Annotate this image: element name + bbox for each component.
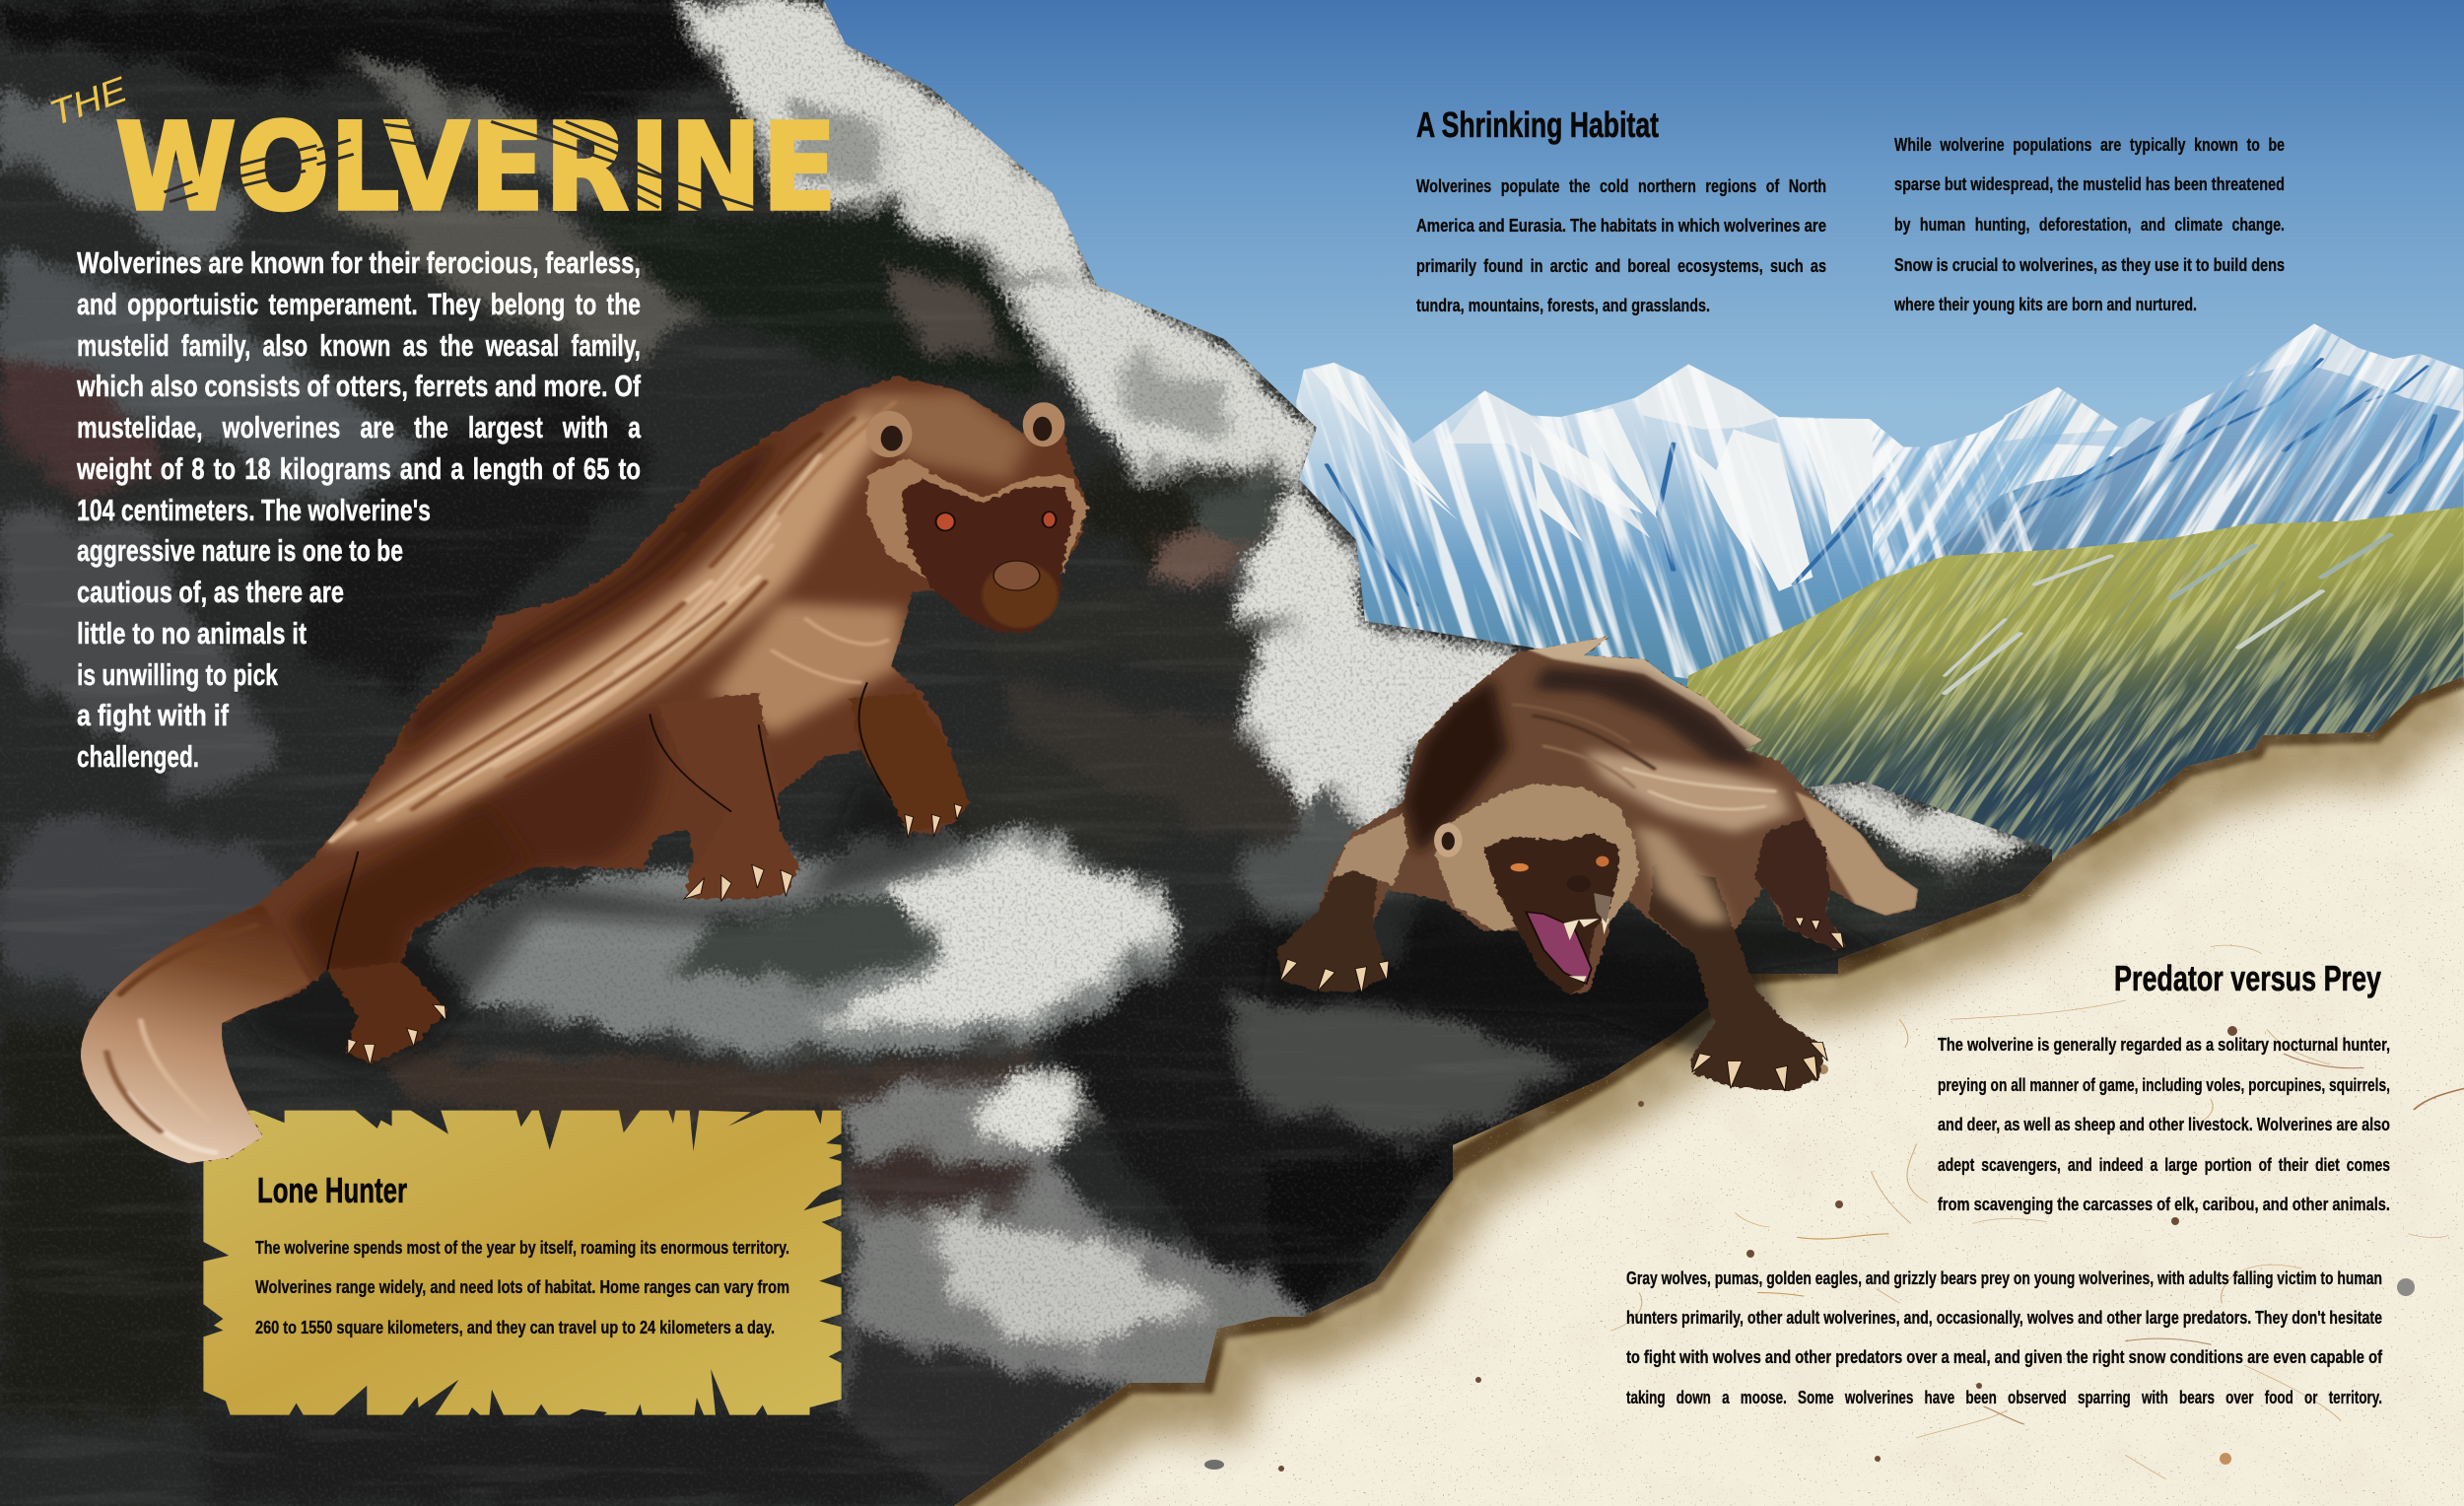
text block: introduction: aggressive nature is one to be [77,533,403,568]
near front leg [1649,863,1825,1091]
back dark edge [398,434,779,756]
blue rock streaks [1327,359,2434,605]
teeth [1564,918,1608,982]
paper flecks [1204,1026,2415,1472]
panel: mountain range [1296,323,2464,861]
text block: introduction: which also consists of otters, ferrets and more. Of [76,369,642,403]
slope texture [1687,509,2464,861]
text block: habitat left column: primarily found in arctic and boreal ecosystems, such as [1416,256,1826,276]
claws [348,804,962,1065]
body text: 260 to 1550 square kilometers, and they can travel up to 24 kilometers a day. [255,1318,775,1337]
text block: introduction: mustelid family, also known as the weasal family, [77,328,641,363]
text block: habitat left column: tundra, mountains, forests, and grasslands. [1416,296,1710,315]
ear: left [866,411,912,457]
leg contour [327,714,779,970]
text block: introduction: a fight with if [77,698,230,732]
fur shading clipped to body [73,392,1030,1168]
text block: introduction: weight of 8 to 18 kilograms and a length of 65 to [76,451,641,486]
head fur [854,392,1030,482]
tan fringe on back [1514,633,1765,754]
far front leg [1277,870,1388,992]
text block: introduction [76,245,642,774]
mask [1483,833,1619,994]
text block: predator paragraph one [1938,1035,2390,1214]
text block: introduction: challenged. [77,739,199,774]
title: THE: THE [44,68,133,134]
text block: habitat left column [1416,176,1826,315]
fur strokes [1514,705,1775,809]
body silhouette [81,376,1088,1163]
right massif [1907,324,2464,578]
ear inner left [881,426,903,451]
text block: introduction: mustelidae, wolverines are the largest with a [77,410,642,445]
text block: habitat right column: Snow is crucial to wolverines, as they use it to build dens [1894,255,2285,275]
dark back crest [1534,667,1765,769]
raised leg [851,693,969,833]
head [1434,784,1639,994]
ruff [1436,784,1639,930]
ear inner [1442,832,1455,851]
face ruff [867,458,1088,587]
text block: introduction: is unwilling to pick [77,657,279,692]
text block: predator paragraph two [1626,1268,2383,1407]
body text: The wolverine spends most of the year by itself, roaming its enormous territory. [255,1238,789,1258]
dark face mask [901,479,1074,632]
ear: right [1023,402,1064,446]
pale slope streaks [1945,535,2390,693]
text block: habitat left column: Wolverines populate the cold northern regions of North [1416,176,1826,196]
front leg [656,693,799,899]
burnt shadow along torn edge [887,670,2464,1506]
raised leg contour [858,682,891,798]
text block: introduction: and opportuistic temperament. They belong to the [77,287,641,321]
head [866,402,1088,632]
eye: left [1511,863,1529,871]
panel: Lone Hunter callout [203,1111,842,1415]
hind paw [327,962,446,1062]
text block: habitat left column: America and Eurasia. The habitats in which wolverines are [1416,216,1826,236]
body text [255,1238,789,1337]
muzzle [982,563,1059,628]
eye: left [935,513,955,530]
green lower slope [1658,507,2464,894]
belly shade [440,709,661,915]
ear inner right [1033,417,1052,441]
snow texture right massif [1873,323,2464,575]
snow texture left peaks [1297,363,2032,679]
snow peaks [1296,324,2464,894]
text block: introduction: 104 centimeters. The wolverine's [77,493,431,527]
torn yellow card [203,1111,842,1415]
text block: habitat right column: While wolverine populations are typically known to be [1894,135,2285,155]
body silhouette [1277,637,1918,1091]
claws [1279,918,1844,1091]
illustration: standing wolverine [73,376,1088,1168]
text block: habitat right column [1893,135,2285,314]
cast shadow [236,778,969,1078]
text block: introduction: cautious of, as there are [77,575,344,609]
text block: habitat right column: where their young kits are born and nurtured. [1893,295,2197,314]
hind leg fur [1795,791,1918,916]
flank highlight [1584,750,1790,833]
chest fur [711,603,901,735]
heading: Predator versus Prey: Predator versus Prey [2114,958,2381,998]
title [44,68,837,238]
text block: habitat right column: sparse but widespread, the mustelid has been threatened [1894,174,2285,194]
nose [993,561,1040,590]
text block: habitat right column: by human hunting, deforestation, and climate change. [1894,215,2285,235]
hind quarter [290,804,527,978]
tail [73,904,310,1168]
shoulder fur [1634,825,1730,924]
neck shadow [1403,678,1508,856]
far shoulder fur [1333,814,1407,886]
nose [1567,875,1591,892]
snow streaks [1312,324,2464,591]
eye: right [1043,512,1056,527]
heading: A Shrinking Habitat: A Shrinking Habitat [1416,104,1659,145]
text block: introduction: little to no animals it [77,616,307,650]
paper fibres [1610,945,2464,1478]
hind leg dark [1754,818,1845,950]
panel: torn parchment paper [887,670,2464,1506]
light dorsal stripe [317,402,915,846]
muzzle fang [1594,893,1611,924]
body text: Wolverines range widely, and need lots of habitat. Home ranges can vary from [255,1277,789,1297]
ear [1434,823,1463,857]
title: WOLVERINE: WOLVERINE [115,98,837,238]
text block: introduction: Wolverines are known for their ferocious, fearless, [77,245,641,280]
heading: Lone Hunter: Lone Hunter [257,1170,407,1210]
eye: right [1596,856,1608,866]
claw scratches across title [164,119,770,212]
cast shadow [1263,893,1885,1082]
mouth [1526,912,1592,984]
fur shading clipped to body [1403,633,1918,950]
blue texture [1873,327,2464,582]
fur strokes [106,402,894,1152]
illustration: snarling wolverine [1263,633,1918,1091]
